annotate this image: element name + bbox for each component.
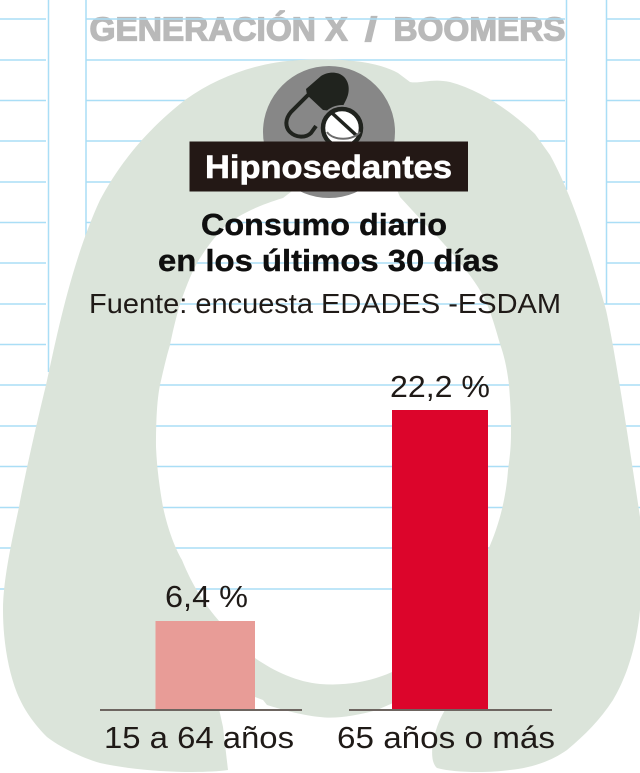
icon: pills [263, 66, 395, 198]
subtitle: Consumo diario [201, 207, 447, 242]
title: / [365, 10, 377, 48]
value 6,4 %: 6,4 % [165, 579, 248, 614]
capsule outline [286, 95, 316, 137]
heading band: Hipnosedantes [205, 149, 452, 185]
source: Fuente: encuesta EDADES -ESDAM [89, 288, 561, 319]
title: BOOMERS [394, 10, 566, 48]
icon background circle [263, 66, 395, 198]
capsule dark half [306, 73, 349, 112]
bar: 15 a 64 años [156, 621, 255, 711]
title [90, 10, 566, 48]
title: GENERACIÓN X [90, 10, 348, 48]
subtitle [158, 207, 499, 278]
label 65 años o más: 65 años o más [337, 720, 555, 755]
tablet [319, 105, 365, 151]
bar chart [100, 369, 555, 755]
label 15 a 64 años: 15 a 64 años [104, 720, 294, 755]
value 22,2 %: 22,2 % [390, 369, 490, 404]
bar: 65 años o más [392, 410, 488, 710]
subtitle: en los últimos 30 días [158, 243, 499, 278]
heading band [190, 142, 468, 192]
